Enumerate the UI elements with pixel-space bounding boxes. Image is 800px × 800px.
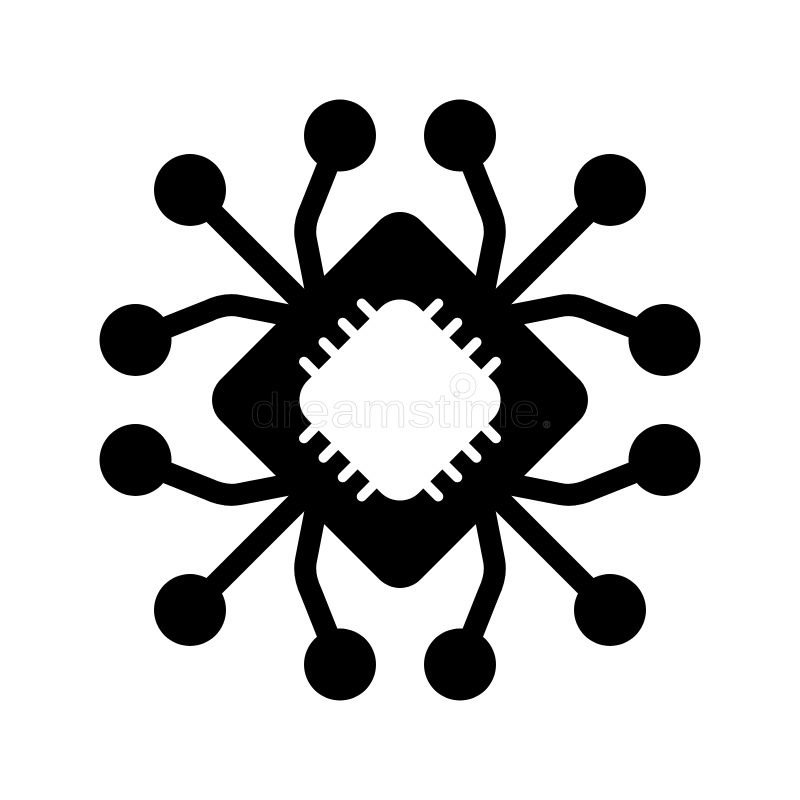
- chip pins: white ticks: [304, 304, 496, 496]
- traces and nodes: lower right quadrant: [424, 424, 700, 700]
- node branch: diagonal lower left: [154, 480, 320, 646]
- node branch: right upper: [488, 304, 700, 376]
- traces and nodes: upper left quadrant: [100, 100, 376, 376]
- node branch: bottom left: [304, 488, 376, 700]
- node branch: left lower: [100, 424, 312, 496]
- node branch: diagonal upper right: [480, 154, 646, 320]
- node branch: left upper: [100, 304, 312, 376]
- node branch: top right: [424, 100, 496, 312]
- watermark registered mark: ®: [543, 420, 551, 431]
- traces and nodes: upper right quadrant: [424, 100, 700, 376]
- node branch: diagonal lower right: [480, 480, 646, 646]
- traces and nodes: lower left quadrant: [100, 424, 376, 700]
- watermark wordmark: dreamstime: [250, 385, 540, 438]
- node branch: top left: [304, 100, 376, 312]
- node branch: diagonal upper left: [154, 154, 320, 320]
- node branch: bottom right: [424, 488, 496, 700]
- chip body: black rounded diamond: [200, 200, 600, 600]
- node branch: right lower: [488, 424, 700, 496]
- chip core: white rounded diamond: [288, 288, 512, 512]
- watermark swirl logo: [450, 373, 476, 399]
- watermark: [250, 373, 551, 438]
